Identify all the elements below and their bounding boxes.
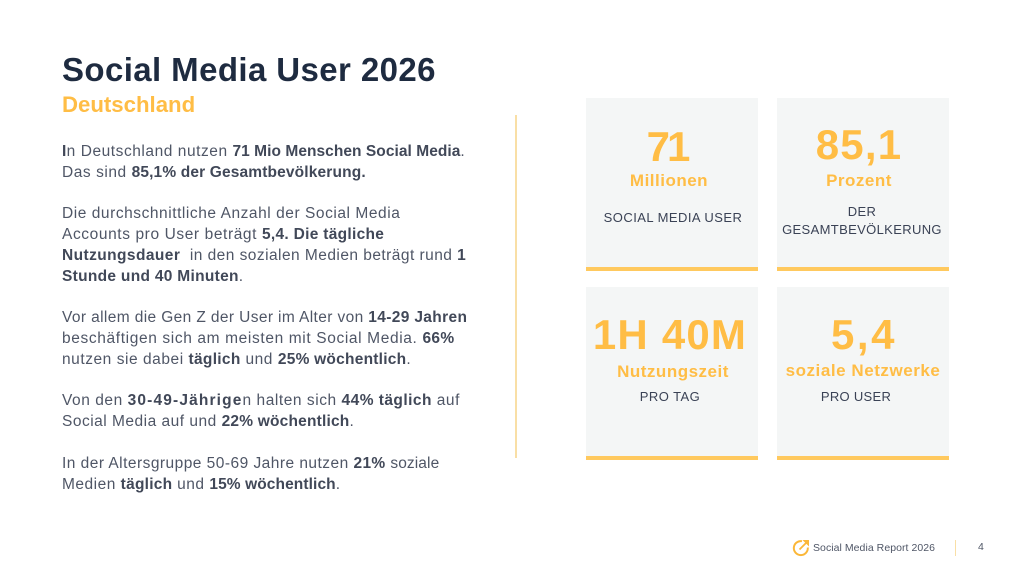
text block: 50-69: [62, 455, 439, 493]
label: pro User: PRO USER: [821, 389, 891, 404]
title: Social Media User 2026: [62, 51, 436, 88]
text block: accounts and usage: Accounts pro User beträgt 5,4. Die tägliche: [62, 226, 384, 243]
text block: intro: [62, 143, 465, 181]
label: pro Tag: PRO TAG: [640, 389, 700, 404]
panel: social networks: [777, 287, 949, 460]
subtitle: Deutschland: [62, 92, 195, 117]
text block: 30-49: Social Media auf und 22% wöchentlich.: [62, 413, 354, 430]
number: 71: 71: [647, 123, 687, 170]
text block: intro: Das sind 85,1% der Gesamtbevölkerung.: [62, 164, 366, 181]
text block: 30-49: [62, 392, 460, 430]
footer label: Social Media Report 2026: [813, 542, 935, 554]
unit: Millionen: Millionen: [630, 171, 708, 190]
unit: Nutzungszeit: Nutzungszeit: [617, 362, 729, 381]
text block: accounts and usage: [62, 205, 466, 285]
text block: Gen Z: Vor allem die Gen Z der User im Alter von 14-29 Jahren: [62, 309, 467, 326]
unit: Prozent: Prozent: [826, 171, 892, 190]
footer logo icon: [792, 540, 809, 556]
vertical divider: [515, 115, 517, 458]
text block: 50-69: In der Altersgruppe 50-69 Jahre nutzen 21% soziale: [62, 455, 439, 472]
text block: 30-49: Von den 30-49-Jährigen halten sich 44% täglich auf: [62, 392, 460, 409]
panel: share of population: [777, 98, 949, 271]
panel: social media user: [586, 98, 758, 271]
text block: Gen Z: nutzen sie dabei täglich und 25% wöchentlich.: [62, 351, 411, 368]
text block: Gen Z: beschäftigen sich am meisten mit Social Media. 66%: [62, 330, 455, 347]
text block: accounts and usage: Stunde und 40 Minuten.: [62, 268, 244, 285]
panel: usage time: [586, 287, 758, 460]
unit: soziale Netzwerke: soziale Netzwerke: [786, 361, 940, 380]
number: 1H 40M: 1H 40M: [593, 311, 747, 358]
page number: 4: [978, 541, 984, 553]
text block: accounts and usage: Nutzungsdauer in den sozialen Medien beträgt rund 1: [62, 247, 466, 264]
label: social media user: SOCIAL MEDIA USER: [604, 210, 742, 225]
text block: Gen Z: [62, 309, 467, 368]
number: 5,4: 5,4: [831, 311, 897, 358]
number: 85,1: 85,1: [816, 121, 902, 168]
text block: accounts and usage: Die durchschnittliche Anzahl der Social Media: [62, 205, 400, 222]
footer divider: [955, 540, 956, 556]
text block: 50-69: Medien täglich und 15% wöchentlich.: [62, 476, 341, 493]
text block: intro: In Deutschland nutzen 71 Mio Menschen Social Media.: [62, 143, 465, 160]
label: der Gesamtbevölkerung: DER GESAMTBEVÖLKERUNG: [782, 204, 942, 237]
